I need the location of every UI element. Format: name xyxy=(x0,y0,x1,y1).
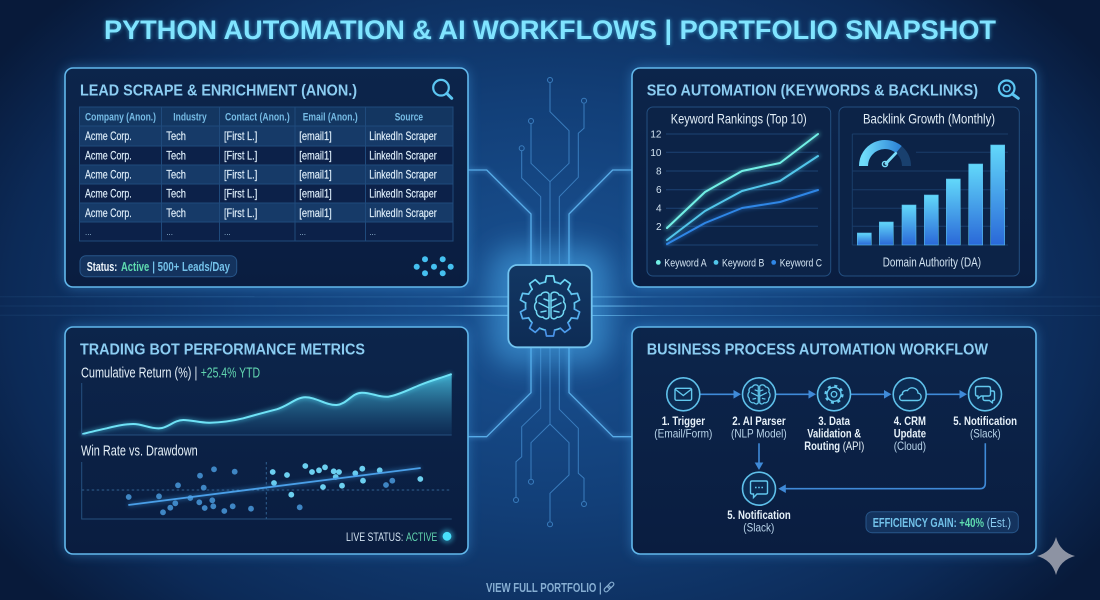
lead data table: Tech xyxy=(166,129,186,143)
lead data table: Contact (Anon.) xyxy=(225,112,290,124)
workflow arrows xyxy=(700,390,985,493)
node: AI parser: 2. AI Parser xyxy=(732,414,786,428)
node: CRM update xyxy=(893,378,926,453)
node: notification top: (Slack) xyxy=(970,426,1001,440)
lead data table: ... xyxy=(369,228,376,237)
lead data table: [email1] xyxy=(299,206,332,220)
efficiency gain badge xyxy=(866,512,1018,533)
main title: PYTHON AUTOMATION & AI WORKFLOWS | PORTFOLIO SNAPSHOT xyxy=(104,15,996,45)
lead data table: [First L.] xyxy=(224,206,257,220)
lead data table: [email1] xyxy=(299,129,332,143)
lead data table: ... xyxy=(224,228,231,237)
heading: SEO automation: SEO AUTOMATION (KEYWORDS & BACKLINKS) xyxy=(647,83,978,100)
cumulative return label: +25.4% YTD xyxy=(201,365,260,381)
lead data table: Email (Anon.) xyxy=(303,112,358,124)
heading: lead scrape: LEAD SCRAPE & ENRICHMENT (ANON.) xyxy=(80,83,357,100)
node: data validation xyxy=(804,378,864,453)
lead data table: Industry xyxy=(173,112,207,124)
lead data table xyxy=(80,107,453,241)
lead data table: Acme Corp. xyxy=(85,129,132,143)
node: CRM update: 4. CRM xyxy=(894,414,926,428)
icon: sparkle watermark xyxy=(1037,537,1075,575)
circuit traces xyxy=(0,78,1100,527)
live status: LIVE STATUS: xyxy=(346,530,403,544)
node: notification lower: (Slack) xyxy=(743,520,774,534)
efficiency gain badge: (Est.) xyxy=(987,516,1011,530)
bar chart: backlink growth: Domain Authority (DA) xyxy=(883,255,981,269)
bar chart: backlink growth xyxy=(839,107,1019,276)
node: notification lower xyxy=(727,472,791,534)
status pill: Status: xyxy=(87,259,117,274)
panel: SEO automation xyxy=(632,68,1036,287)
lead data table: Acme Corp. xyxy=(85,206,132,220)
node: CRM update: Update xyxy=(894,426,926,440)
node: AI parser: (NLP Model) xyxy=(731,426,787,440)
bar chart: backlink growth: Backlink Growth (Monthly) xyxy=(863,111,995,127)
icon: gear with brain xyxy=(520,276,580,336)
node: trigger xyxy=(654,378,712,440)
node: data validation: Validation & xyxy=(807,426,861,440)
central AI chip xyxy=(490,247,610,365)
lead data table: LinkedIn Scraper xyxy=(369,168,437,182)
node: data validation: Routing (API) xyxy=(804,439,864,453)
line chart: keyword rankings: Keyword Rankings (Top 10) xyxy=(671,111,807,127)
live status: ACTIVE xyxy=(406,530,437,544)
lead data table: Source xyxy=(395,112,423,124)
lead data table: [email1] xyxy=(299,148,332,162)
node: trigger: (Email/Form) xyxy=(654,426,712,440)
panel: lead scrape and enrichment xyxy=(65,68,468,287)
area chart: cumulative return xyxy=(82,374,452,435)
chart legend: Keyword A xyxy=(664,257,707,269)
icon: gauge xyxy=(864,144,907,167)
lead data table: Company (Anon.) xyxy=(85,112,156,124)
line chart: keyword rankings: 4 xyxy=(656,204,662,214)
main title: PYTHON AUTOMATION & AI WORKFLOWS | PORTFOLIO SNAPSHOT xyxy=(104,15,996,45)
chart legend: Keyword B xyxy=(722,257,764,269)
icon: magnifier with target xyxy=(999,80,1018,98)
footer link xyxy=(0,573,1100,595)
lead data table: [First L.] xyxy=(224,168,257,182)
heading: workflow: BUSINESS PROCESS AUTOMATION WORKFLOW xyxy=(647,342,988,359)
win rate label: Win Rate vs. Drawdown xyxy=(81,443,198,459)
line chart: keyword rankings: 12 xyxy=(650,130,662,140)
node: notification lower: 5. Notification xyxy=(727,508,791,522)
lead data table: ... xyxy=(85,228,92,237)
chart legend xyxy=(656,257,822,269)
lead data table: Acme Corp. xyxy=(85,186,132,200)
lead data table: [First L.] xyxy=(224,148,257,162)
icon: node dots xyxy=(414,256,454,276)
panel: business process workflow xyxy=(632,327,1036,554)
panel: trading bot performance xyxy=(65,327,468,554)
lead data table: [First L.] xyxy=(224,186,257,200)
lead data table: LinkedIn Scraper xyxy=(369,129,437,143)
efficiency gain badge: +40% xyxy=(959,516,984,530)
line chart: keyword rankings: 8 xyxy=(656,166,662,178)
status pill: Active xyxy=(121,259,149,274)
node: notification top: 5. Notification xyxy=(953,414,1017,428)
node: trigger: 1. Trigger xyxy=(662,414,705,428)
status pill xyxy=(80,256,237,277)
lead data table: Tech xyxy=(166,148,186,162)
efficiency gain badge: EFFICIENCY GAIN: xyxy=(873,516,957,530)
lead data table: LinkedIn Scraper xyxy=(369,186,437,200)
cumulative return label: Cumulative Return (%) | xyxy=(81,365,197,381)
live status xyxy=(346,529,454,544)
lead data table: Tech xyxy=(166,186,186,200)
node: AI parser xyxy=(731,378,787,440)
chart legend: Keyword C xyxy=(780,257,822,269)
lead data table: Tech xyxy=(166,206,186,220)
lead data table: LinkedIn Scraper xyxy=(369,148,437,162)
line chart: keyword rankings: 6 xyxy=(656,185,662,196)
node: notification top xyxy=(953,378,1017,440)
line chart: keyword rankings: 10 xyxy=(650,148,662,159)
lead data table: [First L.] xyxy=(224,129,257,143)
scatter plot: win rate vs drawdown xyxy=(82,462,452,519)
lead data table: LinkedIn Scraper xyxy=(369,206,437,220)
lead data table: [email1] xyxy=(299,186,332,200)
lead data table: ... xyxy=(166,228,173,237)
heading: trading bot: TRADING BOT PERFORMANCE METRICS xyxy=(80,342,365,359)
lead data table: Acme Corp. xyxy=(85,148,132,162)
line chart: keyword rankings xyxy=(647,107,831,276)
node: CRM update: (Cloud) xyxy=(894,439,926,453)
line chart: keyword rankings: 2 xyxy=(656,222,662,233)
lead data table: [email1] xyxy=(299,168,332,182)
node: data validation: 3. Data xyxy=(818,414,850,428)
lead data table: Acme Corp. xyxy=(85,168,132,182)
lead data table: ... xyxy=(299,228,306,237)
status pill: | 500+ Leads/Day xyxy=(152,259,231,274)
lead data table: Tech xyxy=(166,168,186,182)
icon: magnifier xyxy=(433,80,452,98)
footer link: VIEW FULL PORTFOLIO | xyxy=(486,581,602,595)
